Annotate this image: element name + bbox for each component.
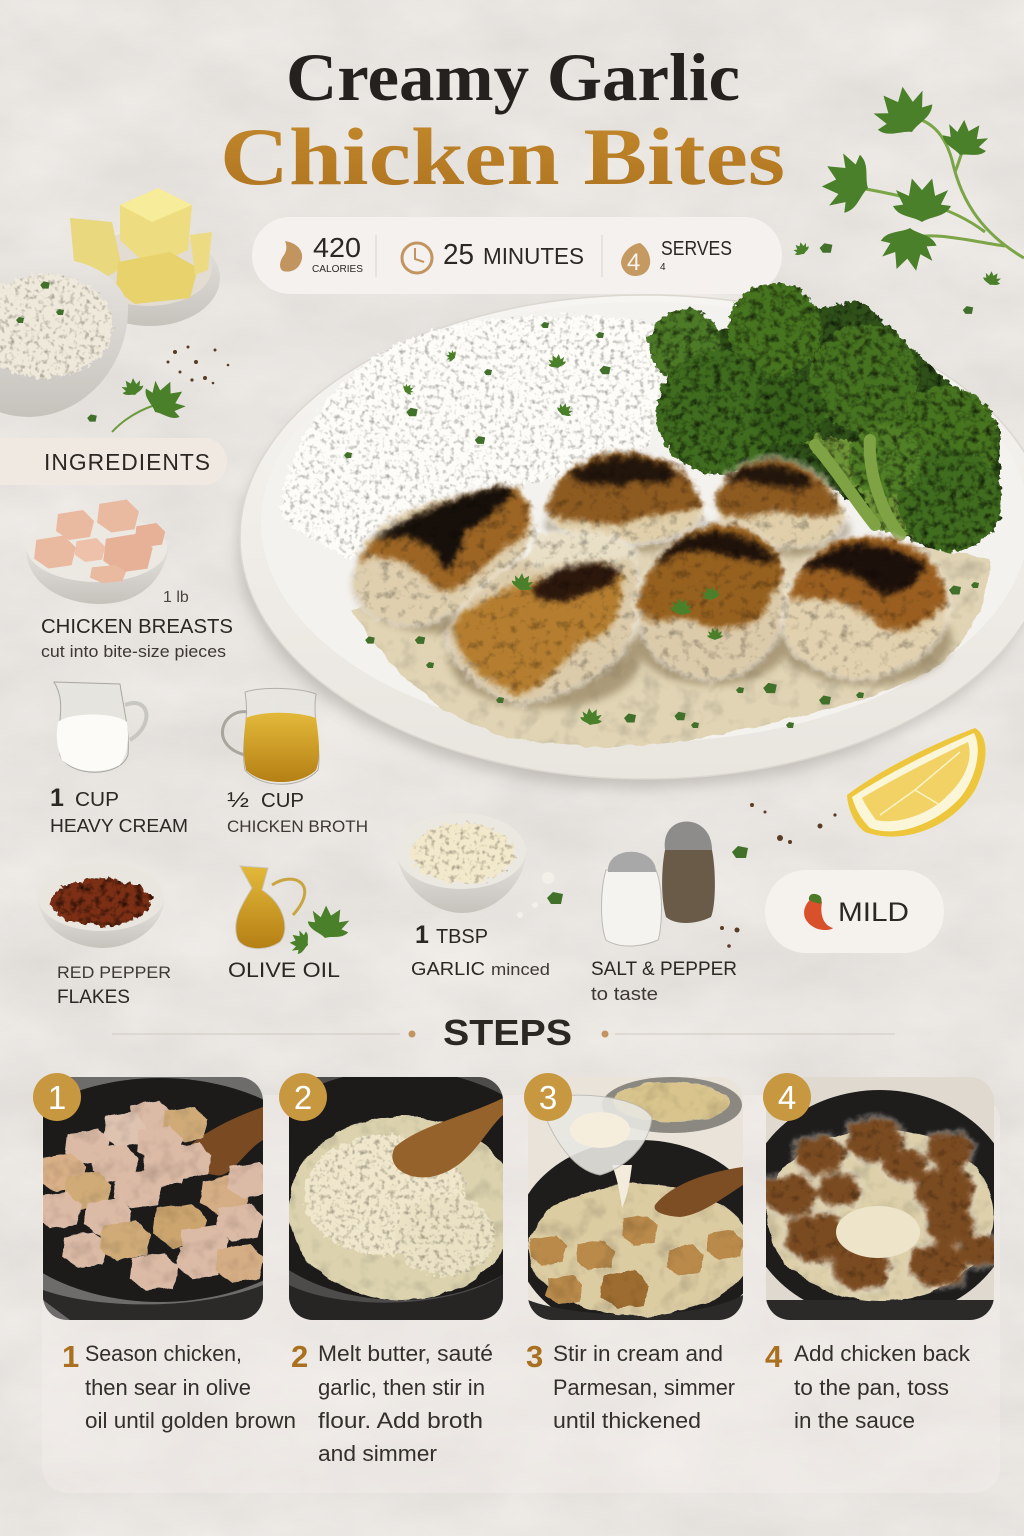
icon: salt shaker <box>602 852 662 946</box>
stat: time: MINUTES <box>483 243 584 269</box>
step 2 text: flour. Add broth <box>318 1408 483 1433</box>
loose herb and salt scatter <box>517 846 748 918</box>
ingredient: red pepper flakes: FLAKES <box>57 987 130 1008</box>
stat: calories: 420 <box>313 232 361 263</box>
butter bowl <box>70 188 220 326</box>
plate <box>240 295 1024 779</box>
plate with food <box>238 283 1024 788</box>
step 1 number badge <box>33 1073 81 1121</box>
step 4 text: 4 <box>765 1339 783 1374</box>
ingredient: olive oil: OLIVE OIL <box>228 959 340 982</box>
step 4 text: in the sauce <box>794 1408 915 1433</box>
ingredient: minced garlic: minced <box>491 960 550 979</box>
ingredients heading pill <box>0 438 227 485</box>
icon: bowl of raw chicken <box>26 500 170 604</box>
ingredient: minced garlic: TBSP <box>436 926 488 948</box>
spice level badge: MILD <box>838 897 909 927</box>
ingredient: heavy cream: CUP <box>75 789 119 811</box>
rice bowl <box>0 258 128 417</box>
ingredient: chicken broth: CHICKEN BROTH <box>227 817 368 836</box>
icon: cream pitcher <box>54 682 146 772</box>
stat: time: 25 <box>443 239 474 271</box>
ingredient: chicken breasts: 1 lb <box>163 589 189 606</box>
step 3 text: 3 <box>526 1339 543 1374</box>
pepper specks <box>166 346 837 948</box>
icon: broth jug <box>222 688 319 784</box>
step 3 text: until thickened <box>553 1408 701 1433</box>
parsley flecks on dish <box>344 322 979 728</box>
ingredient: heavy cream: 1 <box>50 784 64 812</box>
stat: servings: 4 <box>627 249 640 276</box>
step 1 photo: chicken searing in skillet <box>43 1077 263 1320</box>
step 4 <box>763 1073 994 1428</box>
ingredient: chicken breasts: CHICKEN BREASTS <box>41 616 233 638</box>
steps panel background <box>42 1095 1000 1493</box>
step 4 number badge: 4 <box>778 1079 796 1116</box>
spice level badge <box>765 870 944 953</box>
ingredient: red pepper flakes <box>38 863 171 1008</box>
chicken piece 3 <box>713 458 848 548</box>
step 2 text <box>291 1339 493 1466</box>
icon: parsley sprig top right <box>791 79 1024 314</box>
step 2 text: and simmer <box>318 1441 437 1466</box>
step 3 number badge: 3 <box>539 1079 557 1116</box>
ingredient: heavy cream: HEAVY CREAM <box>50 815 188 836</box>
step 2 photo: garlic and flour sauce <box>289 1077 503 1320</box>
step 2 number badge <box>279 1073 327 1121</box>
steps heading <box>112 1012 895 1053</box>
step 4 photo: chicken back in sauce <box>766 1077 994 1320</box>
title <box>220 39 785 202</box>
parsley sprig beside bowl <box>87 373 193 432</box>
step 1 text: 1 <box>62 1339 79 1374</box>
icon: chili pepper <box>804 894 833 930</box>
ingredient: chicken broth: ½ <box>227 789 249 812</box>
ingredient: salt and pepper: SALT & PEPPER <box>591 959 737 980</box>
ingredient: minced garlic: GARLIC <box>411 958 485 979</box>
stats bar <box>252 217 782 294</box>
sauce <box>352 537 990 746</box>
title line: Chicken Bites: Chicken Bites <box>220 111 785 202</box>
plate shadow <box>238 308 1024 788</box>
ingredient: heavy cream <box>50 682 188 836</box>
step 1 text: then sear in olive <box>85 1375 251 1400</box>
lemon wedge <box>847 728 986 837</box>
stat: servings: 4 <box>660 262 666 273</box>
step 2 number badge: 2 <box>294 1079 312 1116</box>
step 4 text: to the pan, toss <box>794 1375 949 1400</box>
broccoli stalks <box>815 440 900 535</box>
step 2 text: Melt butter, sauté <box>318 1341 493 1366</box>
icon: bowl of pepper flakes <box>38 863 165 948</box>
step 2 text: 2 <box>291 1339 308 1374</box>
title line: Creamy Garlic: Creamy Garlic <box>286 39 740 115</box>
step 1 text <box>62 1339 296 1433</box>
icon: clock <box>402 243 432 273</box>
ingredients panel <box>0 438 737 1008</box>
icon: serving drop <box>621 243 650 276</box>
chicken piece 1 <box>352 483 535 626</box>
ingredient: salt and pepper: to taste <box>591 984 658 1004</box>
step 2 <box>279 1073 503 1461</box>
step 1 number badge: 1 <box>48 1079 66 1116</box>
ingredient: chicken broth: CUP <box>261 790 304 812</box>
chicken piece 5 <box>635 522 788 680</box>
ingredient: chicken broth <box>222 688 368 836</box>
steps heading: STEPS <box>443 1012 572 1053</box>
icon: flame <box>280 241 302 272</box>
chicken piece 4 <box>447 532 640 705</box>
chicken piece 6 <box>782 534 950 680</box>
butter cubes <box>70 188 212 304</box>
stat: calories: CALORIES <box>312 264 363 275</box>
step 3 text: Parmesan, simmer <box>553 1375 735 1400</box>
step 3 number badge <box>524 1073 572 1121</box>
stat: servings: SERVES <box>661 238 732 260</box>
broccoli <box>649 283 1002 552</box>
stats pill background <box>252 217 782 294</box>
rice <box>280 316 661 560</box>
step 1 <box>33 1073 295 1432</box>
ingredient: chicken breasts: cut into bite-size pieces <box>41 643 226 661</box>
ingredient: red pepper flakes: RED PEPPER <box>57 963 171 982</box>
stat: calories <box>280 232 363 275</box>
icon: olive oil jug with herbs <box>236 866 353 956</box>
step 4 number badge <box>763 1073 811 1121</box>
step 1 text: oil until golden brown <box>85 1408 296 1433</box>
step 1 text: Season chicken, <box>85 1341 242 1366</box>
step 2 text: garlic, then stir in <box>318 1375 485 1400</box>
chicken piece 2 <box>545 450 706 545</box>
stat: time <box>402 239 584 273</box>
step 4 text <box>765 1339 971 1433</box>
step 3 <box>524 1073 743 1428</box>
chicken shadows <box>353 497 952 708</box>
icon: bowl of garlic <box>396 813 527 913</box>
icon: pepper shaker <box>662 822 715 923</box>
step 3 text <box>526 1339 735 1433</box>
stat: servings <box>621 238 732 276</box>
ingredient: olive oil <box>228 866 353 982</box>
ingredients heading pill: INGREDIENTS <box>44 449 211 475</box>
ingredient: minced garlic: 1 <box>415 921 429 949</box>
step 3 text: Stir in cream and <box>553 1341 723 1366</box>
step 4 text: Add chicken back <box>794 1341 971 1366</box>
ingredient: salt and pepper <box>591 822 737 1004</box>
ingredient: chicken breasts <box>26 500 233 661</box>
ingredient: minced garlic <box>396 813 550 979</box>
step 3 photo: pouring cream into skillet <box>528 1077 743 1320</box>
